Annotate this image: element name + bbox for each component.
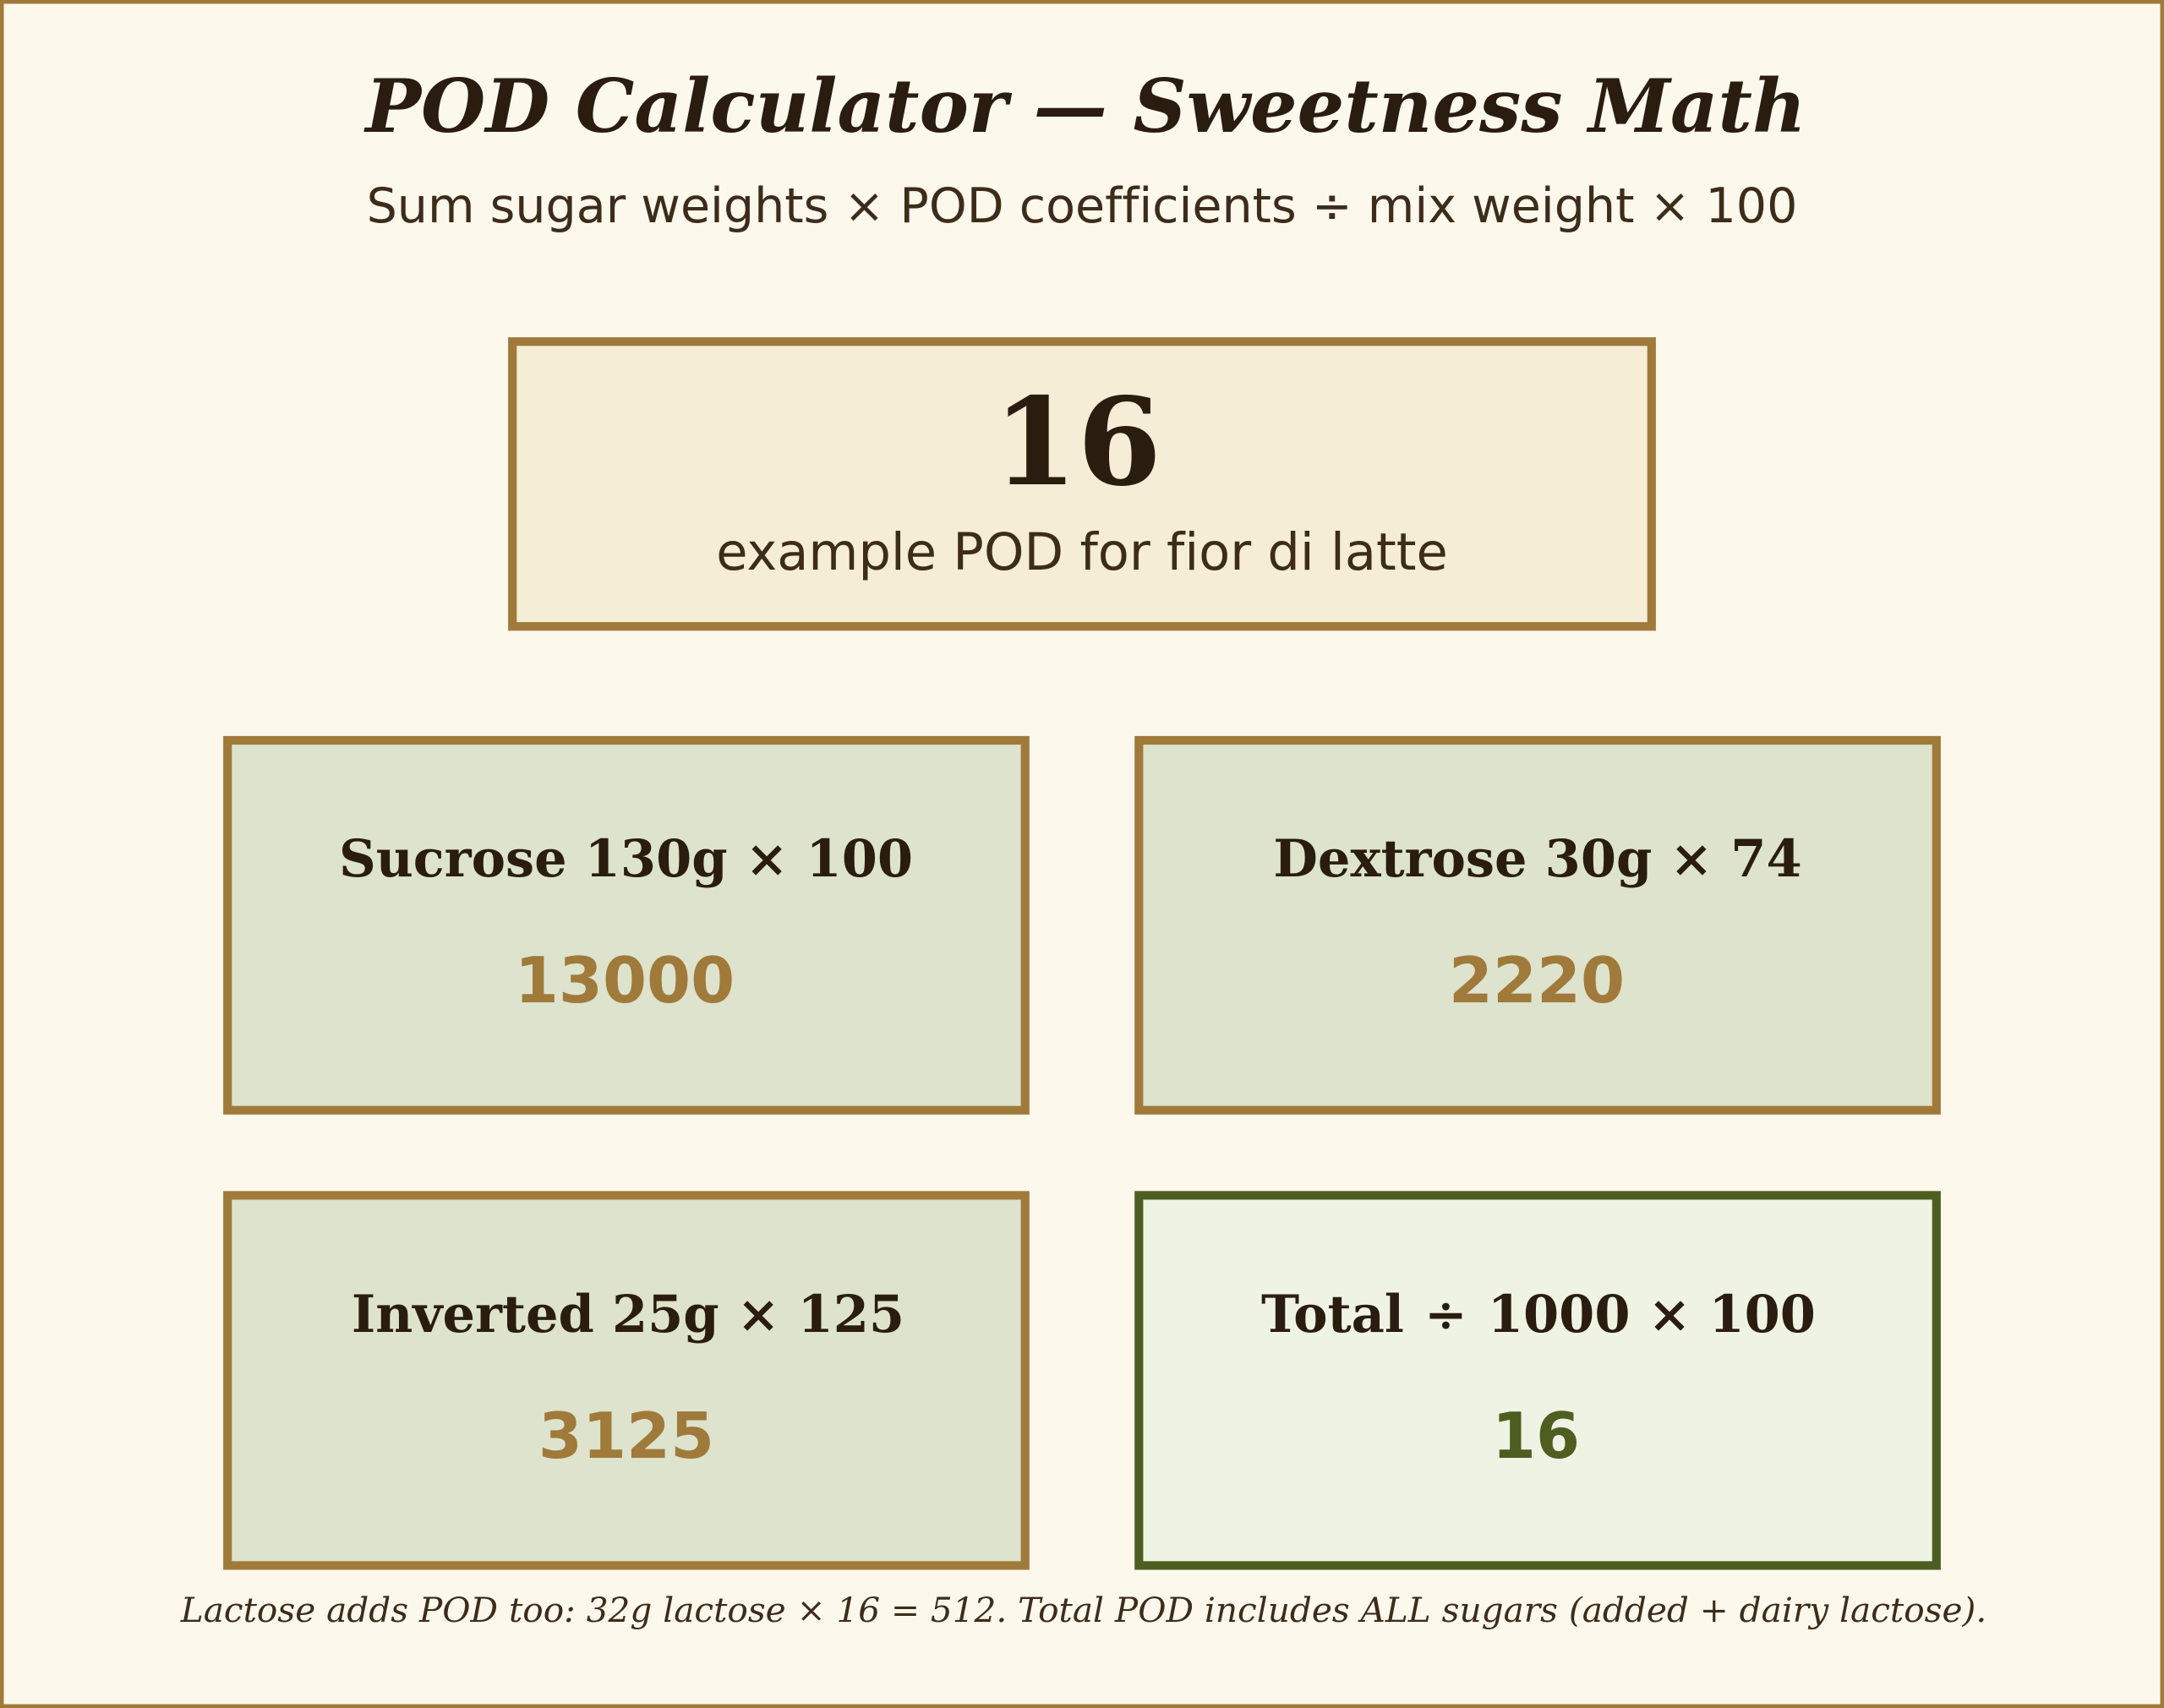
dextrose formula: Dextrose 30g × 74 [1273,829,1802,889]
panel: sucrose [227,740,1025,1110]
sucrose formula: Sucrose 130g × 100 [339,829,913,889]
subtitle: Sum sugar weights × POD coefficients ÷ mix weight × 100 [367,178,1797,234]
sucrose box [227,740,1025,1110]
inverted box [227,1195,1025,1565]
dextrose box [1139,740,1937,1110]
inverted formula: Inverted 25g × 125 [352,1285,904,1345]
headline number: 16 [993,371,1161,513]
panel: inverted sugar [227,1195,1025,1565]
total box [1139,1195,1937,1565]
panel: headline POD value [512,341,1652,626]
headline box [512,341,1652,626]
panel: total [1139,1195,1937,1565]
total formula: Total ÷ 1000 × 100 [1261,1285,1816,1345]
total result: 16 [1492,1400,1580,1473]
sucrose result: 13000 [515,944,735,1018]
panel: dextrose [1139,740,1937,1110]
inverted result: 3125 [538,1400,714,1473]
dextrose result: 2220 [1449,944,1625,1018]
headline caption: example POD for fior di latte [716,523,1448,582]
title: POD Calculator — Sweetness Math [363,63,1806,150]
footnote: Lactose adds POD too: 32g lactose × 16 = 512. Total POD includes ALL sugars (added + dairy lactose). [180,1590,1986,1630]
